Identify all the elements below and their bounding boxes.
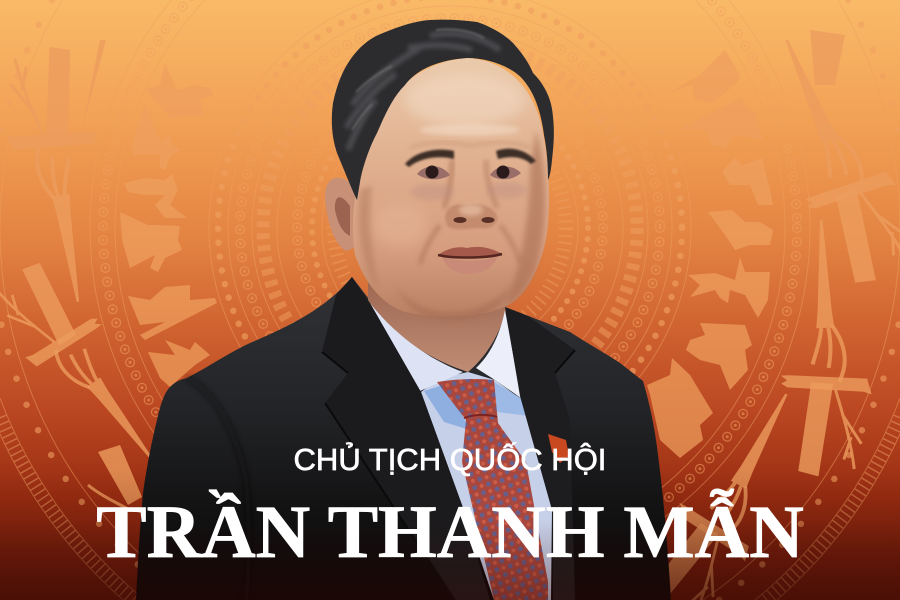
sleeve seam bbox=[187, 378, 249, 600]
mouth bbox=[438, 247, 502, 274]
shirt bbox=[370, 303, 552, 600]
drum pattern: small figures on the left bbox=[120, 63, 217, 387]
bottom vignette over suit bbox=[0, 520, 900, 600]
ear bbox=[325, 178, 362, 251]
tie bbox=[437, 379, 548, 600]
drum pattern: small figures on the right bbox=[647, 50, 773, 458]
subtitle: CHỦ TỊCH QUỐC HỘI bbox=[294, 442, 606, 477]
hair bbox=[332, 20, 554, 200]
eyes bbox=[417, 166, 521, 179]
nose bbox=[445, 204, 497, 229]
suit jacket bbox=[136, 277, 671, 600]
name heading: TRẦN THANH MẪN bbox=[96, 491, 804, 574]
lower background shading bbox=[0, 470, 900, 600]
lapel pin bbox=[548, 434, 569, 463]
eyebrows bbox=[405, 149, 536, 167]
face shadows and modelling bbox=[359, 74, 545, 320]
lapels bbox=[322, 277, 575, 600]
neck bbox=[368, 262, 522, 372]
face bbox=[353, 58, 549, 317]
portrait of the chairman bbox=[136, 20, 671, 600]
